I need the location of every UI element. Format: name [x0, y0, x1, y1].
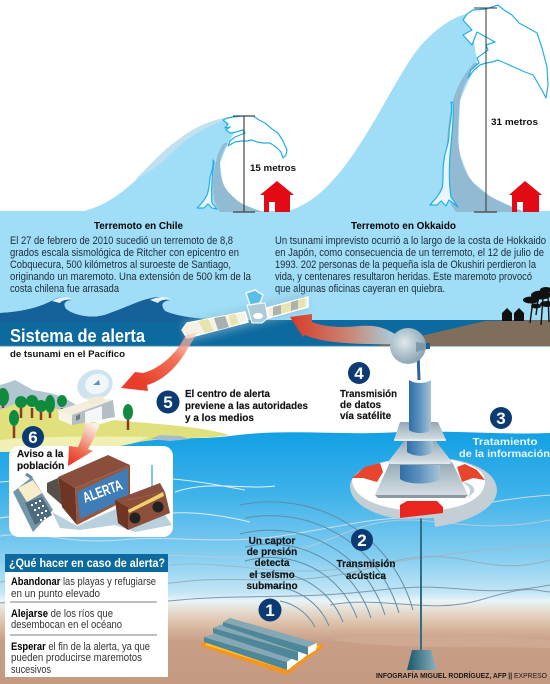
measure line: 15 metros [233, 116, 296, 212]
text block: Terremoto en Chile: costa chilena fue arrasada [10, 283, 120, 295]
anchor [407, 650, 437, 670]
number 2 and label: acústica [346, 571, 386, 582]
trees [0, 388, 133, 438]
tip: abandonar [11, 576, 156, 600]
icon: radio [115, 465, 170, 530]
number 1: 1 [265, 601, 275, 620]
number 1 [258, 598, 282, 622]
credit: INFOGRAFÍA MIGUEL RODRÍGUEZ, AFP || EXPRESO [376, 671, 547, 680]
tip: alejarse: Alejarse de los ríos que [11, 608, 113, 620]
building [58, 398, 115, 425]
icon: alert screen [47, 455, 130, 525]
antenna dish [390, 328, 430, 364]
tip: esperar: sucesivos [11, 664, 51, 676]
measure line: 15 metros: 15 metros [250, 163, 296, 174]
callout: Un captor de presión [246, 536, 298, 592]
arrow: buoy to satellite [290, 314, 398, 344]
text block: Terremoto en Okkaido: Terremoto en Okkaido [351, 220, 456, 232]
callout: Un captor de presión: de presión [247, 547, 297, 558]
tip: alejarse [11, 608, 122, 631]
number 5 and label [156, 389, 308, 424]
satellite [182, 290, 308, 338]
measure line: 31 metros: 31 metros [491, 117, 538, 128]
text block: Terremoto en Chile: El 27 de febrero de 2010 sucedió un terremoto de 8,8 [10, 235, 233, 247]
text block: Terremoto en Okkaido [275, 220, 546, 295]
text block: Terremoto en Chile: grados escala sismológica de Ritcher con epicentro en [10, 247, 239, 259]
number 5 and label: 5 [163, 393, 173, 412]
icon: mobile phone [13, 474, 53, 532]
number 4 and label: vía satélite [340, 411, 392, 422]
number 5 and label: El centro de alerta [185, 389, 270, 400]
text block: Terremoto en Chile: Cobquecura, 500 kilómetros al suroeste de Santiago, [10, 259, 231, 271]
label: aviso [17, 449, 64, 472]
number 5 and label: y a los medios [185, 413, 254, 424]
icon: red house Okkaido [509, 181, 542, 212]
sea: underwater background [0, 432, 550, 684]
wave: Okkaido [285, 5, 548, 212]
tip: esperar: pueden producirse maremotos [11, 652, 142, 664]
heading: Sistema de alerta: Sistema de alerta [10, 326, 146, 346]
shadow [52, 508, 172, 532]
icon: alert screen: ALERTA [81, 477, 125, 507]
panel: light blue water with the two waves [0, 5, 550, 323]
number 2 and label: 2 [357, 531, 367, 550]
callout: Un captor de presión: Un captor [249, 536, 295, 547]
number 4 and label: de datos [340, 400, 382, 411]
number 2 and label: Transmisión [337, 559, 395, 570]
panel header: ¿Qué hacer en caso de alerta? [9, 558, 165, 570]
land with huts and palm trees [375, 287, 550, 346]
heading: Sistema de alerta [10, 326, 146, 360]
text block: Terremoto en Chile: originando un maremoto. Una extensión de 500 km de la [10, 271, 252, 283]
band: dark ocean with waves [0, 297, 550, 346]
tip: abandonar: en un punto elevado [11, 588, 100, 600]
number 6: 6 [28, 428, 38, 447]
panel: aviso a la población [9, 423, 173, 537]
number 3 and label: 3 [496, 409, 506, 428]
sensor on seabed [200, 618, 325, 675]
panel: ¿Qué hacer en caso de alerta? [5, 554, 168, 677]
text block: Terremoto en Chile: Terremoto en Chile [94, 220, 183, 232]
text block: Terremoto en Okkaido: que algunas oficinas cayeran en quiebra. [275, 283, 445, 295]
tip: esperar: Esperar el fin de la alerta, ya que [11, 641, 150, 653]
icon: red house Chile [260, 181, 294, 212]
heading: Sistema de alerta: de tsunami en el Pacífico [10, 349, 125, 360]
tip: abandonar: Abandonar las playas y refugiarse [11, 576, 156, 588]
text block: Terremoto en Chile [10, 220, 252, 295]
callout: Un captor de presión: submarino [246, 581, 298, 592]
wave: Chile [0, 115, 287, 212]
callout: Un captor de presión: el seísmo [249, 570, 295, 581]
label: aviso: población [17, 461, 64, 472]
mast and platforms [375, 352, 468, 498]
label: aviso: Aviso a la [17, 449, 64, 460]
number 3 and label: Tratamiento [472, 436, 538, 448]
life ring [350, 457, 497, 527]
tip: esperar [11, 641, 150, 676]
callout: Un captor de presión: detecta [254, 558, 290, 569]
number 6 [22, 426, 44, 448]
land: coast and alert centre [0, 365, 230, 452]
number 4 and label: Transmisión [340, 389, 397, 400]
number 3 and label [459, 407, 550, 460]
acoustic transmission arcs [240, 502, 413, 627]
number 4 and label: 4 [354, 364, 364, 383]
panel header [5, 554, 168, 572]
number 4 and label [340, 362, 397, 422]
number 3 and label: de la información [459, 448, 550, 460]
satellite dish [73, 365, 117, 405]
arrow: centre to population [68, 423, 100, 466]
arrow: satellite to alert centre [121, 332, 198, 391]
number 5 and label: previene a las autoridades [185, 401, 308, 412]
sand highlight [330, 636, 550, 648]
ocean current lines [0, 478, 550, 606]
tip: alejarse: desembocan en el océano [11, 619, 122, 631]
buoy [350, 328, 497, 670]
number 2 and label [337, 529, 395, 582]
mooring line [420, 495, 422, 650]
